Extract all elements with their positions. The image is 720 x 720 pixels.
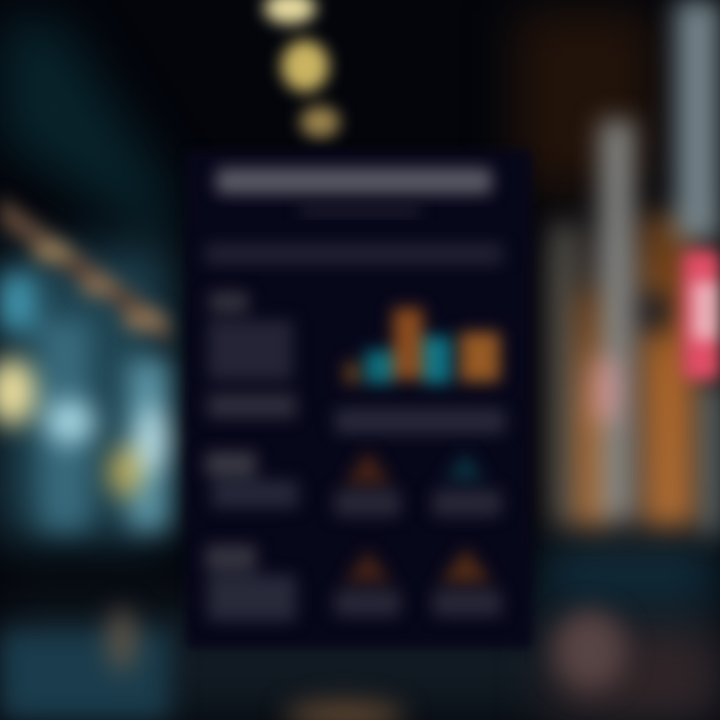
stat card: top right [433, 452, 501, 516]
bar chart [345, 308, 500, 384]
text block: chart caption [335, 408, 505, 434]
icon: orange marker [344, 450, 392, 484]
background: ceiling lamps [264, 0, 340, 138]
background: window lights on left [0, 275, 170, 530]
stat card: bottom right [433, 548, 501, 616]
text block: intro line [205, 243, 503, 265]
heading: title bar [216, 168, 492, 194]
icon: red sign [682, 250, 720, 380]
stat card: bottom left [335, 550, 400, 616]
text block: stat label [335, 590, 400, 616]
text block: stat label [335, 490, 400, 516]
panel: left column section 2 [206, 452, 298, 508]
text block: subtitle [300, 205, 420, 215]
icon: teal marker [445, 452, 485, 480]
icon: orange marker [440, 548, 492, 582]
background: ceiling beam on left [0, 195, 170, 345]
stat card: top left [335, 450, 400, 516]
background: reflective floor [0, 608, 626, 720]
text block: stat label [433, 490, 501, 516]
panel: infographic board [186, 150, 532, 648]
icon: orange marker [344, 550, 392, 582]
background: right columns and signage [515, 0, 720, 720]
panel: left column section 1 [208, 292, 296, 418]
panel: left column section 3 [206, 545, 296, 621]
text block: stat label [433, 590, 501, 616]
